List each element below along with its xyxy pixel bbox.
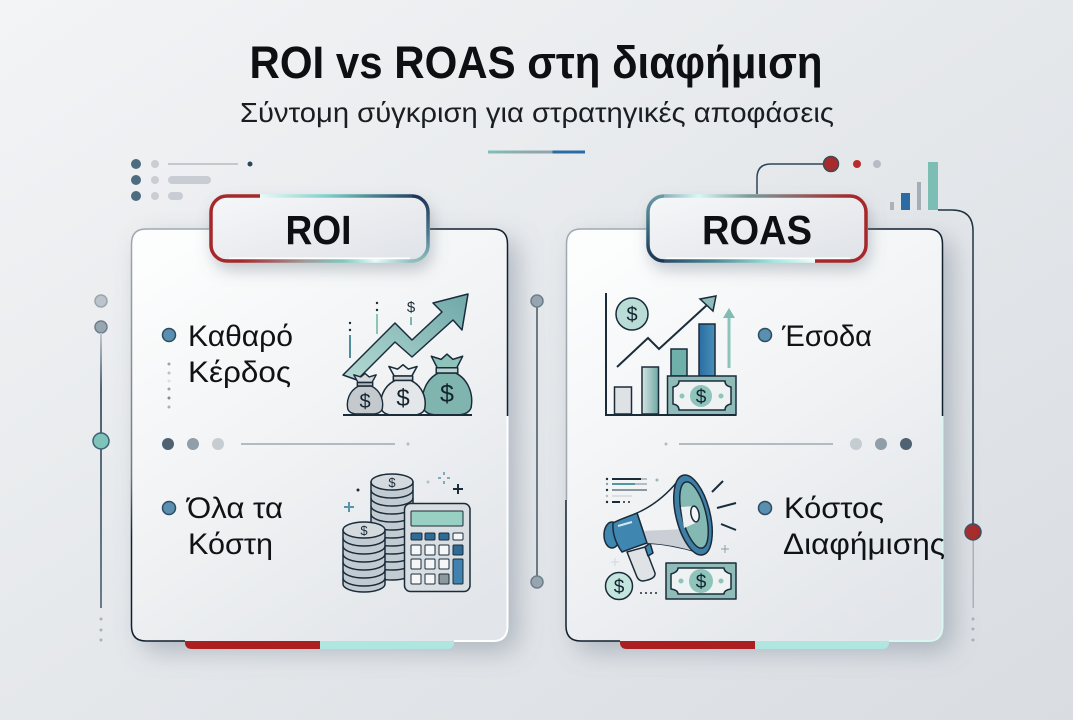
ROAS heading tag: [647, 195, 867, 262]
icon: money bags with rising arrow: $: [359, 391, 371, 413]
panel: ROAS: [566, 195, 945, 649]
icon: money bags with rising arrow: $: [440, 380, 454, 408]
decoration: connector and red nodes above ROAS: [757, 156, 881, 194]
divider dots: [162, 438, 410, 450]
icon: coins and calculator: $: [360, 523, 368, 538]
bullet: all costs: [162, 492, 283, 561]
ROI card: [132, 229, 508, 641]
bullet: all costs: Όλα τα: [185, 492, 283, 525]
divider dots: [664, 438, 912, 450]
ROI footer bar: [185, 641, 454, 649]
bullet: advertising cost: Διαφήμισης: [783, 528, 945, 561]
bullet: advertising cost: [758, 492, 945, 561]
left timeline rail: [93, 295, 109, 642]
title divider: [488, 150, 585, 154]
icon: coins and calculator: $: [388, 475, 396, 490]
decoration: bars and right rail: [890, 162, 981, 642]
title: ROI vs ROAS στη διαφήμιση: [250, 37, 822, 88]
bullet: advertising cost: Κόστος: [784, 492, 884, 525]
icon: megaphone with banknote: [604, 471, 736, 600]
bullet: revenue: Έσοδα: [781, 320, 872, 353]
icon: money bags with rising arrow: [343, 294, 472, 416]
icon: money bags with rising arrow: $: [396, 385, 410, 412]
bullet: net profit: Κέρδος: [188, 356, 291, 389]
bullet: net profit: Καθαρό: [188, 320, 293, 353]
icon: revenue chart: $: [626, 304, 638, 326]
ROI heading tag: [210, 195, 429, 262]
panel: ROI: [132, 195, 508, 649]
icon: revenue chart: $: [696, 387, 707, 408]
subtitle: Σύντομη σύγκριση για στρατηγικές αποφάσεις: [240, 97, 834, 128]
ROAS heading tag: ROAS: [702, 207, 812, 253]
icon: megaphone with banknote: $: [696, 572, 707, 593]
icon: megaphone with banknote: $: [614, 577, 625, 598]
bullet: net profit: [162, 320, 293, 408]
ROAS footer bar: [620, 641, 889, 649]
bullet: all costs: Κόστη: [188, 528, 273, 561]
icon: money bags with rising arrow: $: [407, 299, 416, 316]
ROAS card: [566, 229, 942, 641]
middle timeline rail: [531, 295, 543, 588]
icon: revenue chart: [606, 293, 736, 415]
decoration: top-left list dots: [131, 159, 252, 201]
icon: coins and calculator: [343, 472, 470, 592]
ROI heading tag: ROI: [286, 207, 352, 253]
